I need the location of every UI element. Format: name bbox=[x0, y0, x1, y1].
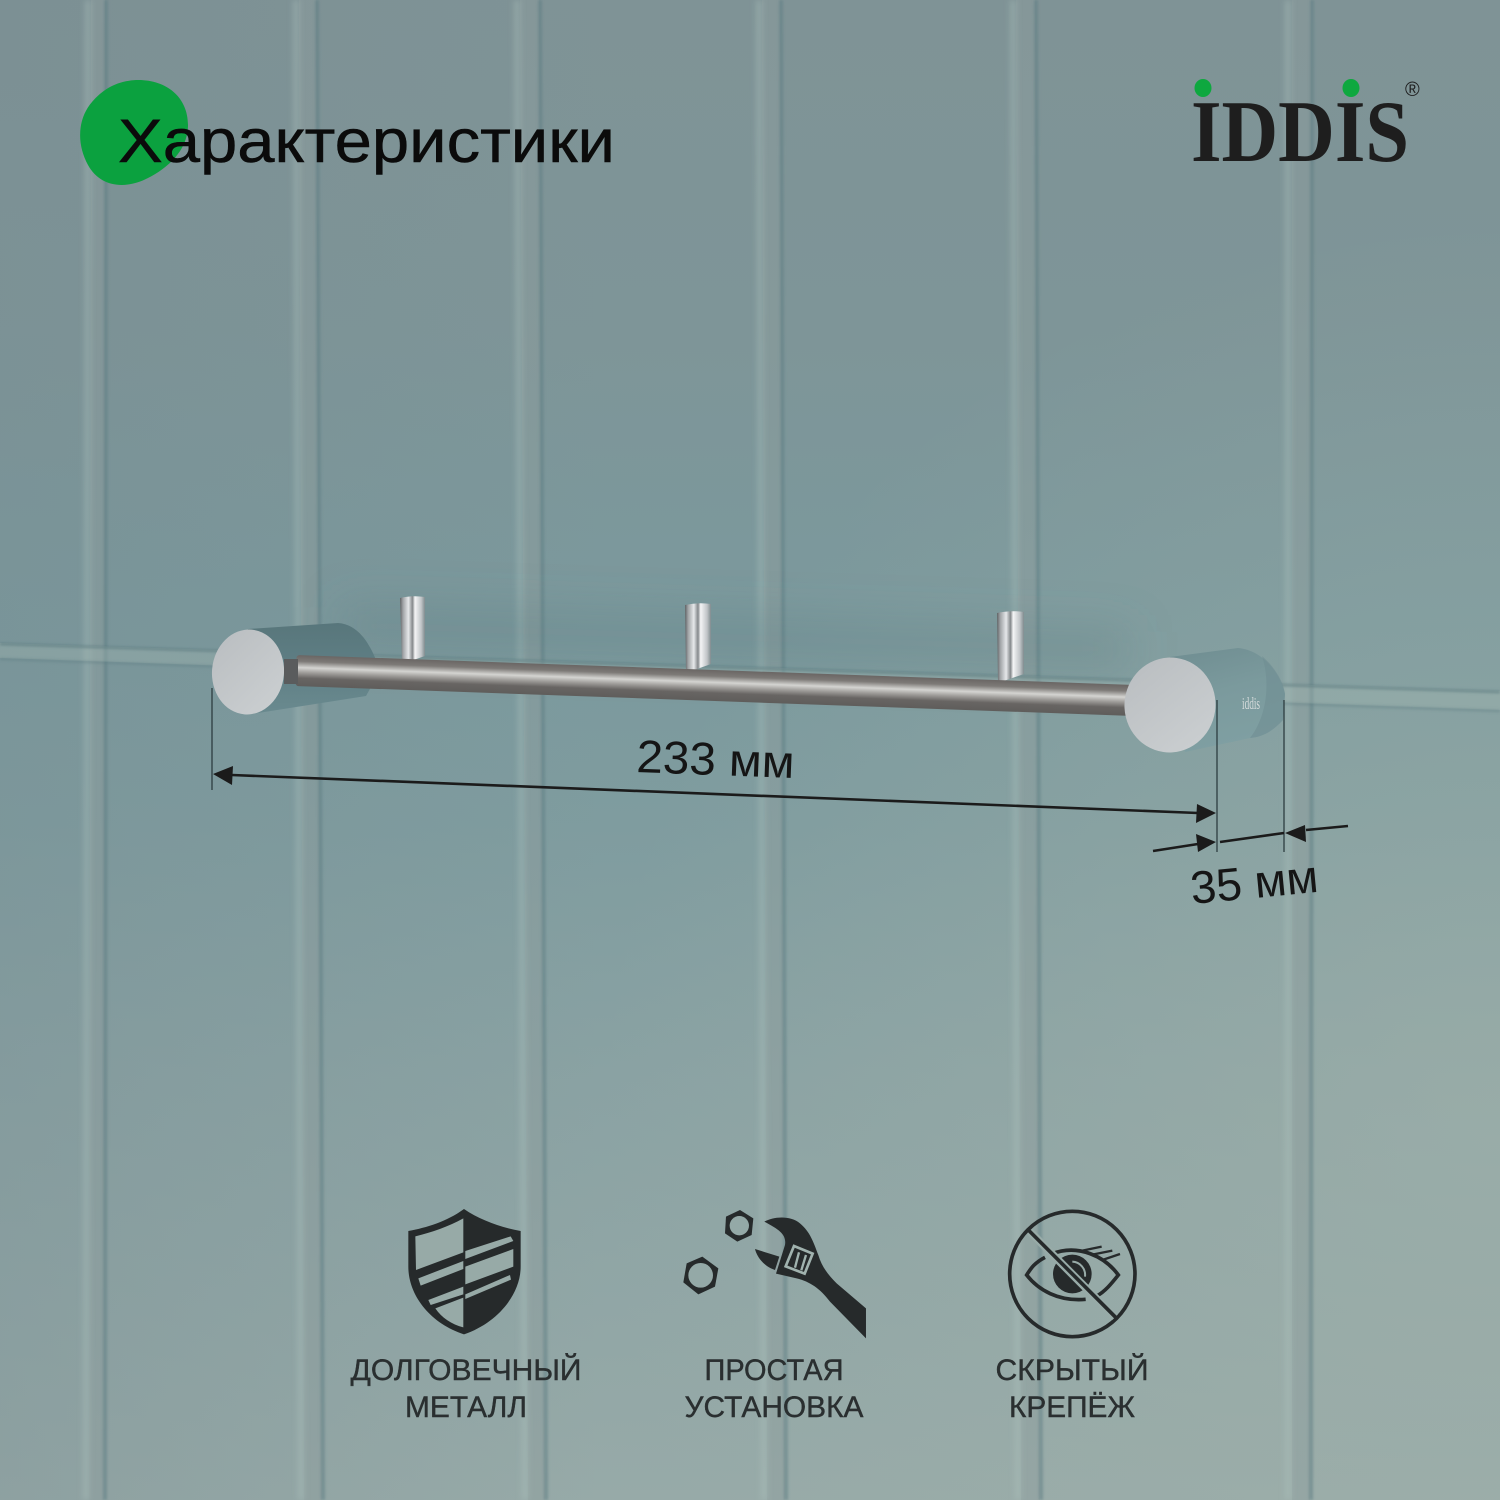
hook rail product bbox=[208, 596, 1285, 758]
feature: hidden fastening: КРЕПЁЖ bbox=[1009, 1391, 1135, 1424]
horizontal grout band bbox=[0, 643, 1500, 710]
title: Характеристики bbox=[118, 107, 615, 175]
feature: durable metal bbox=[350, 1209, 582, 1424]
right wall mount bbox=[1118, 648, 1285, 758]
feature: hidden fastening bbox=[996, 1211, 1148, 1424]
left hook bbox=[400, 596, 425, 664]
feature label: ПРОСТАЯ bbox=[704, 1354, 844, 1387]
engraved brand mark: iddis bbox=[1242, 694, 1260, 713]
right hook bbox=[997, 611, 1024, 683]
feature: easy installation: УСТАНОВКА bbox=[684, 1391, 864, 1424]
feature label: ДОЛГОВЕЧНЫЙ bbox=[350, 1353, 582, 1387]
dimension: length 233 mm: 233 мм bbox=[636, 730, 795, 788]
soft shadow of the rail on the wall bbox=[340, 625, 1130, 650]
middle hook bbox=[685, 603, 711, 673]
green blob behind title bbox=[80, 80, 188, 185]
dimension: depth 35 mm bbox=[1153, 700, 1348, 914]
icon: wrench and nuts bbox=[683, 1210, 866, 1338]
icon: crossed-out eye bbox=[1010, 1211, 1135, 1337]
feature: easy installation bbox=[683, 1210, 866, 1424]
logo: IDDIS: ® bbox=[1405, 79, 1420, 101]
horizontal rod bbox=[284, 655, 1134, 716]
left wall mount bbox=[208, 623, 376, 717]
feature: durable metal: МЕТАЛЛ bbox=[405, 1391, 527, 1424]
dimension: length 233 mm bbox=[212, 688, 1217, 852]
dimension: depth 35 mm: 35 мм bbox=[1188, 850, 1320, 914]
icon: shield bbox=[408, 1209, 521, 1334]
feature label: СКРЫТЫЙ bbox=[996, 1353, 1148, 1387]
logo: IDDIS: IDDIS bbox=[1191, 84, 1409, 181]
